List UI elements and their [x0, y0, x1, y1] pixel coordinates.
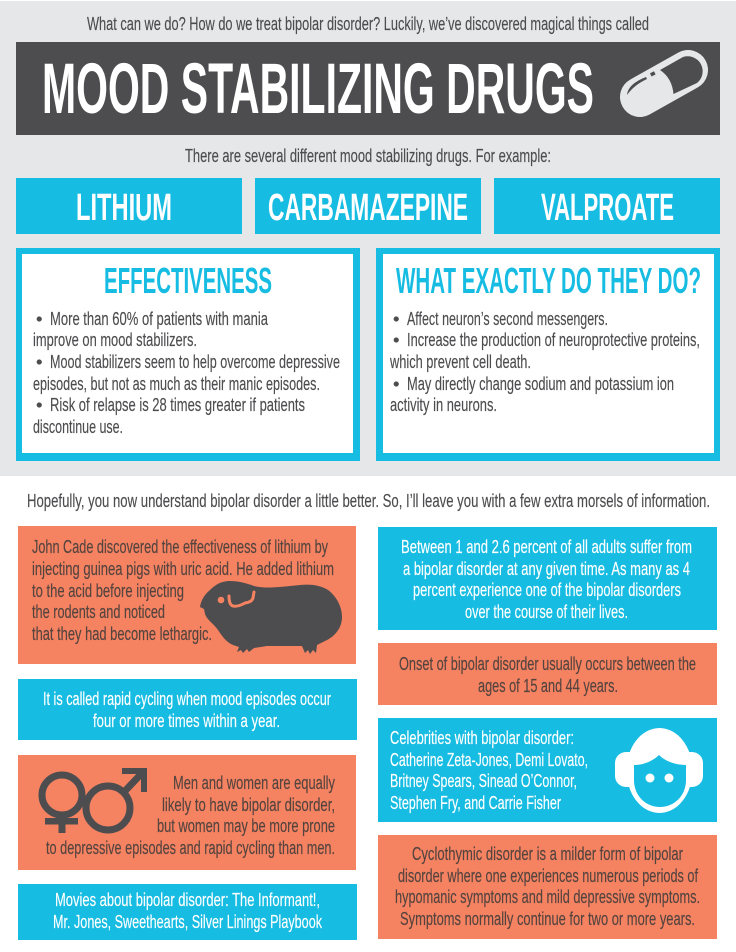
card: onset: [378, 643, 717, 705]
effectiveness bullet list: More than 60% of patients with mania: [50, 308, 268, 329]
card: rapid cycling: [18, 679, 357, 740]
card: prevalence: [378, 527, 717, 630]
card: men and women: to depressive episodes and rapid cycling than men.: [46, 837, 335, 858]
actions bullet list: [389, 308, 700, 415]
drug box: lithium: LITHIUM: [76, 187, 172, 229]
card: celebrities: [378, 718, 717, 822]
drug box: valproate: [494, 178, 720, 234]
card: john cade: injecting guinea pigs with uric acid. He added lithium: [32, 558, 334, 579]
card: john cade: to the acid before injecting: [32, 580, 184, 601]
panel: effectiveness: [16, 248, 360, 461]
card: celebrities: Britney Spears, Sinead O’Connor,: [390, 770, 577, 791]
card: movies: Mr. Jones, Sweethearts, Silver Linings Playbook: [53, 911, 323, 932]
heading: effectiveness: EFFECTIVENESS: [104, 260, 272, 301]
card: celebrities: Celebrities with bipolar disorder:: [390, 727, 574, 748]
card: men and women: likely to have bipolar disorder,: [162, 794, 335, 815]
subheading text: There are several different mood stabilizing drugs. For example:: [185, 145, 551, 166]
card: john cade: [18, 526, 356, 664]
icon: gender symbols: [42, 768, 147, 833]
drug box: lithium: [16, 178, 242, 234]
effectiveness bullet list: Mood stabilizers seem to help overcome depressive: [50, 351, 340, 372]
card: celebrities: Stephen Fry, and Carrie Fisher: [390, 792, 561, 813]
card: celebrities: Catherine Zeta-Jones, Demi Lovato,: [390, 749, 588, 770]
actions bullet list: •: [393, 373, 399, 394]
title banner: [16, 42, 720, 135]
effectiveness bullet list: Risk of relapse is 28 times greater if patients: [50, 394, 305, 415]
actions bullet list: •: [393, 329, 399, 350]
card: onset: ages of 15 and 44 years.: [478, 675, 618, 696]
drug box: carbamazepine: CARBAMAZEPINE: [268, 187, 468, 229]
actions bullet list: Affect neuron’s second messengers.: [407, 308, 608, 329]
card: john cade: the rodents and noticed: [32, 601, 165, 622]
card: men and women: but women may be more prone: [157, 815, 335, 836]
panel: what exactly do they do: [376, 248, 720, 461]
card: rapid cycling: It is called rapid cycling when mood episodes occur: [43, 688, 331, 709]
card: john cade: that they had become lethargic.: [32, 623, 212, 644]
effectiveness bullet list: •: [36, 394, 42, 415]
icon: princess leia face: [615, 728, 703, 813]
card: movies: Movies about bipolar disorder: The Informant!,: [55, 889, 320, 910]
icon: pill: [627, 56, 703, 97]
card: cyclothymic disorder: [378, 835, 717, 939]
effectiveness bullet list: episodes, but not as much as their manic episodes.: [33, 373, 320, 394]
card: men and women: [18, 755, 356, 870]
effectiveness bullet list: discontinue use.: [33, 416, 123, 437]
actions bullet list: •: [393, 308, 399, 329]
card: prevalence: over the course of their lives.: [465, 601, 628, 622]
card: men and women: Men and women are equally: [173, 772, 336, 793]
effectiveness bullet list: •: [36, 351, 42, 372]
effectiveness bullet list: improve on mood stabilizers.: [33, 329, 197, 350]
card: john cade: John Cade discovered the effectiveness of lithium by: [32, 536, 329, 557]
effectiveness bullet list: [33, 308, 340, 437]
card: movies: [18, 884, 357, 940]
card: rapid cycling: four or more times within a year.: [93, 710, 280, 731]
effectiveness bullet list: •: [36, 308, 42, 329]
icon: guinea pig: [200, 581, 342, 654]
actions bullet list: activity in neurons.: [390, 394, 497, 415]
drug box: carbamazepine: [255, 178, 481, 234]
actions bullet list: which prevent cell death.: [389, 351, 531, 372]
